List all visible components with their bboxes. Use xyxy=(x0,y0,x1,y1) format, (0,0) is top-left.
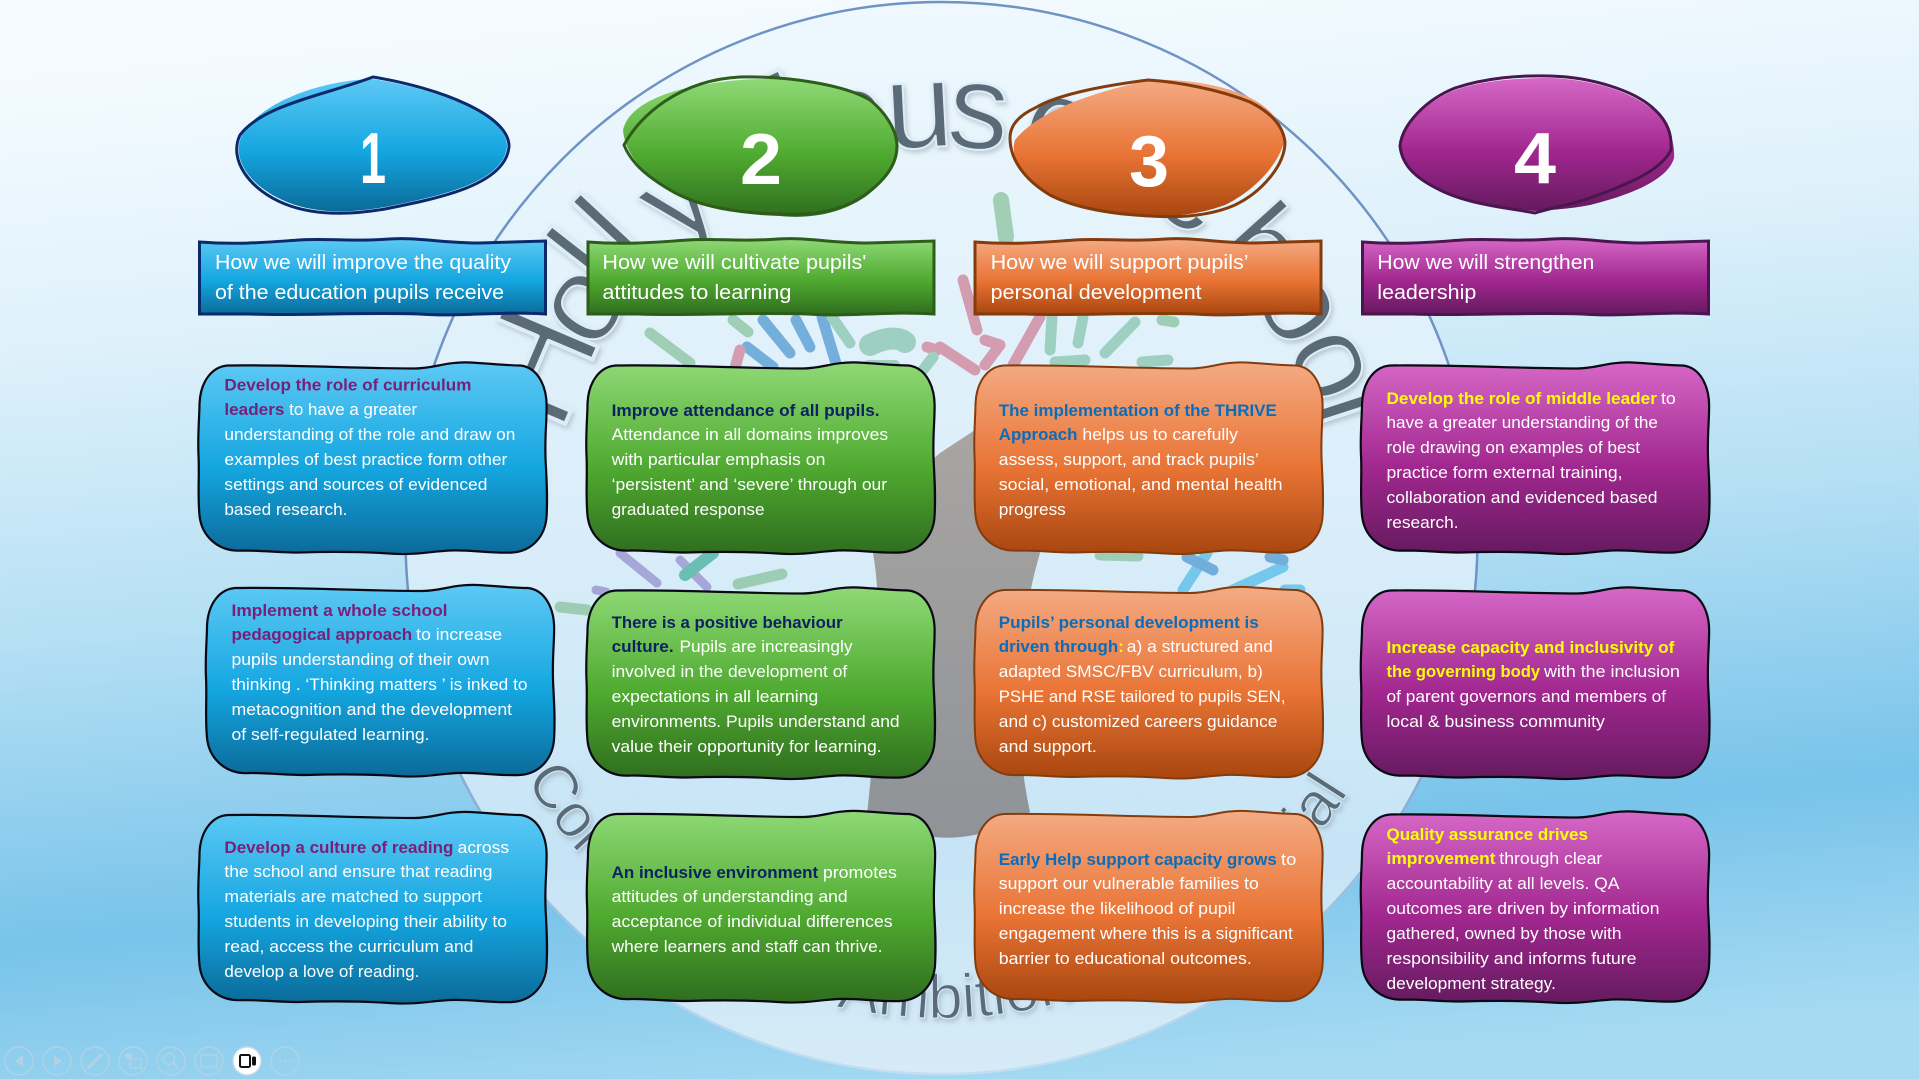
icon: zoom xyxy=(157,1047,185,1075)
card text: Develop the role of curriculum xyxy=(224,376,471,394)
logo lettering: school name: o xyxy=(804,41,899,188)
card text: pedagogical approach xyxy=(232,625,412,644)
card text: Develop a culture of reading xyxy=(224,838,453,857)
card text: the governing body xyxy=(1386,662,1541,681)
card text: Pupils are increasingly xyxy=(680,637,853,656)
card text: ‘persistent’ and ‘severe’ through our xyxy=(612,475,888,494)
card text: Early Help support capacity grows xyxy=(999,850,1277,869)
light blue hand xyxy=(1183,553,1300,590)
number badge 4 xyxy=(1400,76,1674,213)
card text: role drawing on examples of best xyxy=(1386,438,1640,457)
card text: helps us to carefully xyxy=(1082,425,1239,444)
card shape xyxy=(1361,811,1710,1003)
tree trunk xyxy=(867,395,1040,838)
card text: Improve attendance of all pupils. xyxy=(612,401,880,420)
logo lettering: school name: o xyxy=(1229,237,1380,368)
card text: a) a structured and xyxy=(1127,637,1273,656)
icon: video xyxy=(233,1047,261,1075)
card text xyxy=(224,376,515,519)
logo lettering: values: Potential xyxy=(1280,772,1350,838)
card text: develop a love of reading. xyxy=(224,962,419,981)
heading text: personal development xyxy=(991,282,1202,304)
logo lettering: school name: u xyxy=(881,36,956,175)
card text: local & business community xyxy=(1386,712,1606,731)
logo lettering: school name: l xyxy=(545,166,690,305)
heading panel 1 xyxy=(200,239,546,315)
card text: Quality assurance drives xyxy=(1386,825,1588,844)
card shape xyxy=(586,587,935,779)
card text: collaboration and evidenced based xyxy=(1386,488,1658,507)
heading shape xyxy=(1362,239,1708,315)
heading text: How we will cultivate pupils' xyxy=(602,252,866,274)
logo lettering: school name: S xyxy=(1065,70,1198,228)
card text: materials are matched to support xyxy=(224,887,482,906)
card text: to xyxy=(1661,389,1676,408)
card text: thinking . ‘Thinking matters ’ is inked to xyxy=(232,675,528,694)
card text: leaders xyxy=(224,400,284,419)
card text: environments. Pupils understand and xyxy=(612,712,900,731)
card text: attitudes of understanding and xyxy=(612,887,848,906)
card text xyxy=(999,850,1296,968)
card text: gathered, owned by those with xyxy=(1386,924,1622,943)
card text: understanding of the role and draw on xyxy=(224,425,515,444)
card text: graduated response xyxy=(612,500,765,519)
card text: to have a greater xyxy=(289,400,418,419)
card text: the school and ensure that reading xyxy=(224,862,492,881)
icon: previous xyxy=(5,1047,33,1075)
card text xyxy=(1386,825,1660,993)
heading text: leadership xyxy=(1377,282,1476,304)
heading panel 4 xyxy=(1362,239,1708,315)
heading panel 3 xyxy=(975,239,1321,315)
card text: metacognition and the development xyxy=(232,700,513,719)
card text: progress xyxy=(999,500,1066,519)
logo lettering: school name: H xyxy=(678,35,845,232)
card text xyxy=(1386,389,1676,532)
card text: increase the likelihood of pupil xyxy=(999,899,1236,918)
number badge 2 xyxy=(623,77,897,217)
logo lettering: school name: s xyxy=(943,36,1016,177)
logo lettering: values: Community xyxy=(534,766,594,862)
logo lettering: school name: c xyxy=(1131,115,1261,261)
panel: middle leaders xyxy=(1361,362,1710,554)
card text: examples of best practice form other xyxy=(224,450,508,469)
card text: : xyxy=(1118,637,1124,656)
card text: PSHE and RSE tailored to pupils SEN, xyxy=(999,687,1286,706)
panel: pedagogical approach xyxy=(206,585,555,777)
holly leaves xyxy=(560,200,1174,610)
heading text: How we will support pupils’ xyxy=(991,252,1249,274)
card text: value their opportunity for learning. xyxy=(612,737,882,756)
card text: Implement a whole school xyxy=(232,601,448,620)
card shape xyxy=(974,811,1323,1003)
panel: attendance xyxy=(586,362,935,554)
card text: support our vulnerable families to xyxy=(999,874,1259,893)
icon: next xyxy=(43,1047,71,1075)
heading panel 2 xyxy=(588,239,934,315)
heading text xyxy=(991,252,1249,304)
panel: inclusive environment xyxy=(587,811,936,1003)
number: 3 xyxy=(1129,122,1169,202)
icon: subtitles xyxy=(195,1047,223,1075)
logo lettering: values: Ambition xyxy=(837,972,1074,1024)
heading text: attitudes to learning xyxy=(602,282,791,304)
purple hand xyxy=(596,553,707,592)
presentation toolbar xyxy=(5,1047,299,1075)
badge shape xyxy=(1400,76,1674,213)
panel: governing body xyxy=(1361,587,1710,779)
logo lettering: school name: h xyxy=(1190,178,1337,319)
card text: expectations in all learning xyxy=(612,687,818,706)
logo lettering: school name: l xyxy=(1278,359,1448,443)
card text: involved in the development of xyxy=(612,662,848,681)
card text: practice form external training, xyxy=(1386,463,1622,482)
card text: adapted SMSC/FBV curriculum, b) xyxy=(999,662,1263,681)
card text: An inclusive environment xyxy=(612,863,819,882)
card text: improvement xyxy=(1386,849,1496,868)
card text xyxy=(611,863,897,956)
card text xyxy=(999,613,1286,756)
number badge 1 xyxy=(237,77,509,213)
card text: accountability at all levels. QA xyxy=(1386,874,1620,893)
card text: assess, support, and track pupils’ xyxy=(999,450,1259,469)
card text: to increase xyxy=(416,625,502,644)
card text xyxy=(611,401,888,519)
blue hand xyxy=(747,317,838,370)
card text: Approach xyxy=(999,425,1077,444)
logo lettering: school name: H xyxy=(435,282,632,448)
teal-green hand xyxy=(832,317,1168,370)
logo lettering: school name xyxy=(435,35,1448,448)
panel: personal development xyxy=(974,587,1323,779)
card text xyxy=(232,601,528,744)
card text: through clear xyxy=(1499,849,1603,868)
card text: have a greater understanding of the xyxy=(1386,413,1658,432)
heading text xyxy=(1377,252,1594,304)
heading shape xyxy=(200,239,546,315)
badge shape xyxy=(237,77,509,213)
card text: development strategy. xyxy=(1386,974,1556,993)
heading text: How we will strengthen xyxy=(1377,252,1594,274)
badge shape xyxy=(1010,80,1285,217)
logo lettering: values xyxy=(534,766,1350,1024)
card text: of self-regulated learning. xyxy=(232,725,430,744)
card text: with particular emphasis on xyxy=(611,450,825,469)
panel: culture of reading xyxy=(198,812,547,1004)
heading text: of the education pupils receive xyxy=(215,282,504,304)
card text: There is a positive behaviour xyxy=(612,613,843,632)
badge shape xyxy=(623,77,897,217)
card shape xyxy=(974,362,1323,554)
card text: across xyxy=(458,838,509,857)
card text: to xyxy=(1281,850,1296,869)
heading text: How we will improve the quality xyxy=(215,252,511,274)
number: 1 xyxy=(360,119,386,199)
card text: culture. xyxy=(612,637,674,656)
card text: and support. xyxy=(999,737,1097,756)
logo lettering: school name: y xyxy=(609,124,741,269)
card text: Pupils’ personal development is xyxy=(999,613,1259,632)
card text: with the inclusion xyxy=(1543,662,1680,681)
card shape xyxy=(206,585,555,777)
logo lettering: school name: o xyxy=(1261,303,1413,421)
card text: The implementation of the THRIVE xyxy=(999,401,1277,420)
card text: of parent governors and members of xyxy=(1386,687,1666,706)
card text xyxy=(1386,638,1680,731)
card text: acceptance of individual differences xyxy=(612,912,893,931)
logo circle xyxy=(406,2,1478,1074)
card shape xyxy=(1361,362,1710,554)
card shape xyxy=(587,811,936,1003)
card shape xyxy=(198,812,547,1004)
card shape xyxy=(586,362,935,554)
card text: Increase capacity and inclusivity of xyxy=(1386,638,1675,657)
heading text xyxy=(215,252,511,304)
number badge 3 xyxy=(1010,80,1285,217)
panel: THRIVE approach xyxy=(974,362,1323,554)
heading shape xyxy=(975,239,1321,315)
panel: early help xyxy=(974,811,1323,1003)
icon: slides xyxy=(119,1047,147,1075)
card text: Develop the role of middle leader xyxy=(1386,389,1657,408)
card text: and c) customized careers guidance xyxy=(999,712,1277,731)
panel: behaviour culture xyxy=(586,587,935,779)
teal stroke xyxy=(685,553,713,575)
icon: pen xyxy=(81,1047,109,1075)
pink hand xyxy=(735,280,1040,370)
card text: engagement where this is a significant xyxy=(999,924,1293,943)
handprint branches xyxy=(560,200,1300,610)
card text xyxy=(999,401,1282,519)
card text xyxy=(612,613,900,756)
card text: settings and sources of evidenced xyxy=(224,475,487,494)
school logo watermark xyxy=(404,0,1478,1076)
card text: Attendance in all domains improves xyxy=(612,425,888,444)
heading text xyxy=(602,252,866,304)
number: 2 xyxy=(740,120,782,200)
card shape xyxy=(1361,587,1710,779)
logo lettering: school name: l xyxy=(516,200,669,330)
card text: where learners and staff can thrive. xyxy=(611,937,883,956)
card shape xyxy=(198,362,547,554)
card text: outcomes are driven by information xyxy=(1386,899,1660,918)
panel: curriculum leaders xyxy=(198,362,547,554)
panel: quality assurance xyxy=(1361,811,1710,1003)
card text: barrier to educational outcomes. xyxy=(999,949,1252,968)
logo lettering: school name: e xyxy=(1009,47,1112,196)
card text: social, emotional, and mental health xyxy=(999,475,1282,494)
card text xyxy=(224,838,509,981)
logo lettering: school name: o xyxy=(503,237,654,368)
card text: research. xyxy=(1386,513,1458,532)
heading shape xyxy=(588,239,934,315)
card text: driven through xyxy=(999,637,1118,656)
number: 4 xyxy=(1514,119,1556,199)
card text: pupils understanding of their own xyxy=(232,650,490,669)
card text: responsibility and informs future xyxy=(1386,949,1636,968)
card text: students in developing their ability to xyxy=(224,912,507,931)
card text: promotes xyxy=(823,863,897,882)
card text: read, access the curriculum and xyxy=(224,937,473,956)
card shape xyxy=(974,587,1323,779)
card text: based research. xyxy=(224,500,347,519)
icon: more xyxy=(271,1047,299,1075)
